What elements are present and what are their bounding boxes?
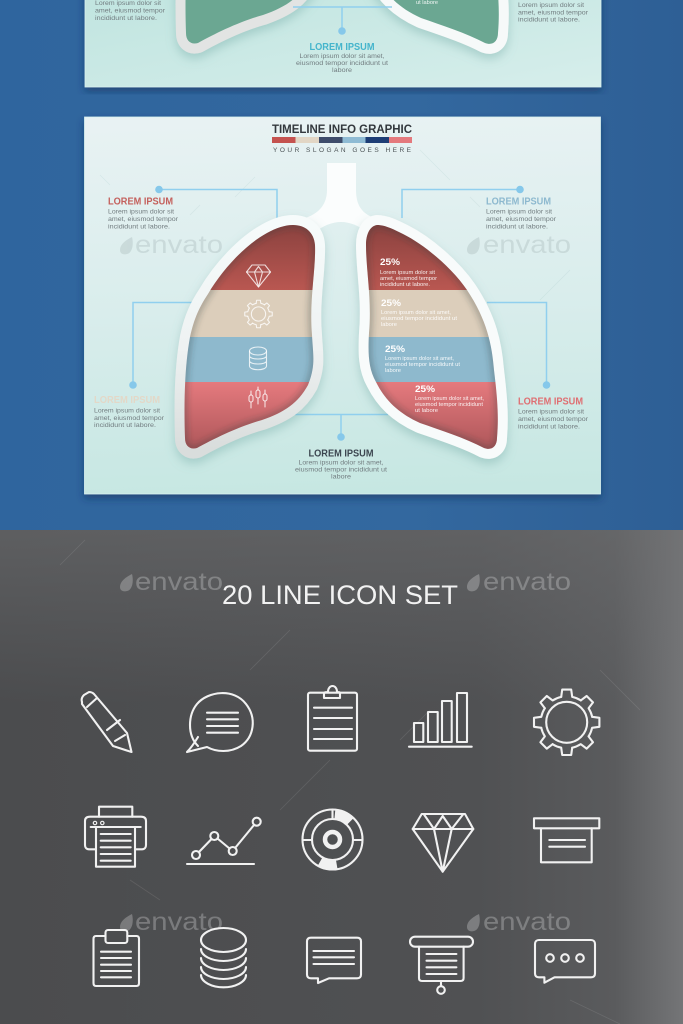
band: blue — [368, 337, 496, 382]
icon: database — [201, 928, 246, 987]
text: top right body: Lorem ipsum dolor sit — [518, 2, 584, 9]
watermark: envato — [135, 568, 223, 596]
title — [272, 124, 412, 154]
icon: sliders — [249, 387, 267, 408]
icon: database — [250, 347, 266, 370]
text: top centre block — [296, 42, 388, 74]
icon: clipboard — [308, 686, 357, 751]
icon: pencil — [82, 692, 132, 752]
icon: archive box — [534, 818, 599, 862]
top connector — [293, 7, 392, 35]
watermark: envato — [135, 908, 223, 936]
text: centre label: eiusmod tempor incididunt ut — [295, 466, 387, 474]
text: lower left label: LOREM IPSUM — [94, 395, 160, 406]
trachea — [305, 163, 375, 232]
text: top right label — [486, 196, 557, 230]
text: 25% beige band: labore — [381, 322, 397, 328]
text: lower right label: Lorem ipsum dolor sit — [518, 408, 584, 416]
text: lower left label: Lorem ipsum dolor sit — [94, 408, 160, 414]
text: top left body: amet, eiusmod tempor — [95, 8, 166, 14]
text: top left label: Lorem ipsum dolor sit — [108, 208, 174, 216]
text: 25% red band — [380, 257, 437, 288]
connector: lower right — [487, 302, 550, 389]
icon: printer — [85, 807, 146, 867]
text: top right label: incididunt ut labore. — [486, 224, 548, 230]
text: 25% red band: amet, eiusmod tempor — [380, 276, 437, 282]
heading: 20 line icon set: 20 LINE ICON SET — [222, 580, 458, 610]
text: top centre block: eiusmod tempor incididunt ut — [296, 60, 388, 67]
text: centre label: labore — [331, 474, 351, 480]
icon: gear — [245, 300, 272, 328]
icon: chat dots — [535, 940, 595, 983]
connector: lower left — [129, 302, 193, 389]
text: lower left label — [94, 395, 165, 429]
text: top right label: LOREM IPSUM — [486, 196, 551, 208]
text: 25% red band: 25% — [380, 257, 401, 268]
text: 25% blue band — [385, 344, 460, 374]
text: top left label: LOREM IPSUM — [108, 196, 173, 208]
text: 25% blue band: Lorem ipsum dolor sit amet, — [385, 356, 454, 362]
text: 25% blue band: labore — [385, 368, 401, 374]
text: 25% pink band: 25% — [415, 384, 436, 395]
connector: centre — [295, 414, 388, 441]
text: centre label — [295, 448, 387, 480]
text: top left label: incididunt ut labore. — [108, 224, 170, 230]
connector: top right — [402, 186, 524, 218]
band: red — [210, 225, 316, 290]
text: 25% beige band — [381, 298, 457, 328]
icon: diamond — [246, 265, 270, 287]
text: centre label: LOREM IPSUM — [308, 448, 374, 460]
text: lower right label: amet, eiusmod tempor — [518, 416, 589, 423]
text: top left body: incididunt ut labore. — [95, 15, 157, 22]
text: 25% pink band: Lorem ipsum dolor sit amet, — [415, 396, 484, 402]
text: 25% beige band: eiusmod tempor incididunt ut — [381, 316, 457, 322]
title colour bar — [272, 137, 412, 143]
text: top centre block: labore — [332, 67, 352, 74]
text: top right label: Lorem ipsum dolor sit — [486, 208, 552, 216]
text: lower right label: LOREM IPSUM — [518, 396, 583, 408]
text: 25% blue band: 25% — [385, 344, 406, 355]
right lung — [355, 220, 505, 454]
watermark: envato — [135, 231, 223, 259]
text: top right body — [518, 2, 589, 24]
text: lower left label: amet, eiusmod tempor — [94, 415, 165, 422]
icon: message box — [307, 938, 361, 983]
text: top right body: amet, eiusmod tempor — [518, 10, 589, 16]
top lungs illustration — [186, 0, 499, 44]
icon: disc — [302, 810, 362, 870]
band: red — [366, 225, 467, 290]
band: pink — [184, 382, 309, 448]
text: 25% pink band: eiusmod tempor incididunt — [415, 402, 483, 408]
text: lobe caption: ut labore — [416, 0, 438, 6]
icon: speech bubble — [187, 693, 253, 752]
text: 25% pink band: ut labore — [415, 408, 438, 414]
watermark: envato — [483, 231, 571, 259]
icon: gear — [534, 689, 600, 755]
text: top right body: incididunt ut labore. — [518, 16, 580, 24]
text: top centre block: LOREM IPSUM — [310, 42, 374, 53]
title: TIMELINE INFO GRAPHIC — [272, 124, 412, 136]
band: beige — [190, 290, 312, 337]
text: centre label: Lorem ipsum dolor sit amet, — [298, 460, 384, 466]
text: 25% beige band: Lorem ipsum dolor sit amet, — [381, 310, 451, 316]
text: top centre block: Lorem ipsum dolor sit amet, — [300, 53, 385, 60]
text: top left label — [108, 196, 179, 230]
text: top left label: amet, eiusmod tempor — [108, 216, 179, 223]
panel: top lung card — [85, 0, 601, 87]
text: top left body: Lorem ipsum dolor sit — [95, 0, 161, 7]
text: top left body — [95, 0, 166, 22]
icon: diamond — [413, 814, 473, 872]
text: 25% beige band: 25% — [381, 298, 402, 309]
text: 25% red band: Lorem ipsum dolor sit — [380, 270, 435, 276]
icon: bar chart — [409, 693, 472, 747]
text: 25% blue band: eiusmod tempor incididunt ut — [385, 362, 460, 368]
text: 25% red band: incididunt ut labore. — [380, 282, 430, 288]
left lung — [170, 220, 330, 454]
text: 25% pink band — [415, 384, 484, 414]
icon: presentation screen — [410, 937, 473, 994]
title: YOUR SLOGAN GOES HERE — [273, 147, 412, 154]
band: beige — [368, 290, 489, 337]
blue background — [0, 0, 683, 530]
band: pink — [376, 382, 498, 449]
text: top right label: amet, eiusmod tempor — [486, 216, 557, 223]
panel: icon set — [0, 530, 683, 1024]
band: blue — [185, 337, 314, 382]
connector: top left — [155, 186, 277, 218]
icon: clipboard small — [94, 930, 139, 986]
text: lower left label: incididunt ut labore. — [94, 422, 156, 429]
watermark: envato — [483, 568, 571, 596]
panel: main lung card — [84, 117, 600, 494]
icon: line chart — [187, 818, 261, 864]
text: lower right label: incididunt ut labore. — [518, 424, 580, 430]
watermark: envato — [483, 908, 571, 936]
text: lower right label — [518, 396, 589, 430]
